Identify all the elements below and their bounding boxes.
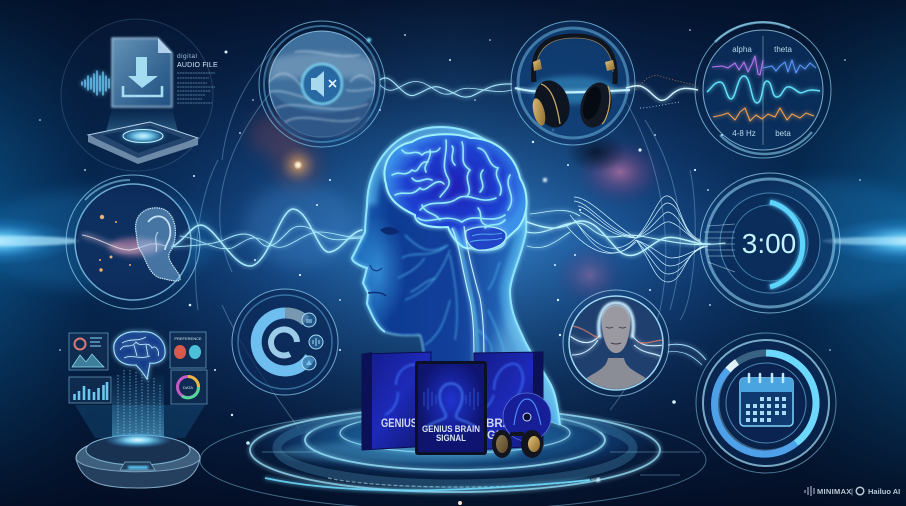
wave labels: 4-8 Hz bbox=[732, 129, 756, 138]
product tablet: SIGNAL bbox=[436, 433, 466, 444]
icon: document with download arrow bbox=[112, 38, 172, 107]
figure bbox=[570, 303, 668, 392]
panel: calendar bbox=[696, 333, 836, 473]
panel: analytics hologram bbox=[69, 332, 207, 488]
watermark: | bbox=[851, 487, 853, 496]
dashboard card: bar chart bbox=[69, 377, 111, 403]
product box: left bbox=[362, 352, 431, 450]
wave labels: theta bbox=[774, 45, 792, 54]
left edge light beam bbox=[0, 217, 80, 265]
watermark bbox=[805, 486, 900, 496]
icon: headphones bbox=[529, 36, 617, 132]
panel: muted sound waves bbox=[259, 21, 385, 147]
brain bbox=[384, 134, 527, 250]
dashboard card: gauge and area chart bbox=[69, 333, 108, 370]
icon: sound wave bars bbox=[82, 71, 109, 95]
icon: muted speaker bbox=[302, 64, 342, 104]
brain stem and nerves bbox=[398, 226, 505, 372]
product box: right: GI bbox=[487, 428, 499, 442]
panel: headphones bbox=[511, 21, 635, 145]
icon: calendar bbox=[740, 374, 793, 426]
ribbon wave: head to timer bbox=[565, 196, 735, 282]
panel: donut chart bbox=[232, 289, 338, 395]
label: digital audio file: digital bbox=[177, 53, 198, 60]
product box: left: GENIUS bbox=[381, 416, 417, 430]
panel: digital audio file bbox=[61, 19, 218, 171]
wave labels bbox=[732, 45, 792, 138]
particle stream bbox=[109, 238, 161, 256]
product box: right: BRA bbox=[486, 416, 511, 430]
light beam from device bbox=[104, 108, 180, 140]
product headphones bbox=[492, 430, 543, 458]
panel: ear bbox=[66, 175, 200, 309]
label: digital audio file: AUDIO FILE bbox=[177, 62, 218, 69]
brainwaves bbox=[707, 56, 820, 121]
product box: right bbox=[474, 352, 543, 450]
product disc bbox=[503, 393, 551, 441]
product tablet bbox=[415, 361, 487, 455]
projector base bbox=[76, 432, 200, 488]
device platform bbox=[88, 122, 198, 164]
dashboard card: ring chart: DATA bbox=[183, 385, 193, 390]
connecting swirl: woman to calendar bbox=[668, 344, 706, 365]
time readout: 3:00 bbox=[742, 228, 796, 259]
dashboard card: profiles bbox=[170, 332, 206, 368]
connecting wave: mute to headphones bbox=[380, 78, 512, 97]
sound wave: ear to head bbox=[172, 209, 362, 266]
icon: holographic brain bbox=[114, 332, 165, 379]
head silhouette bbox=[350, 127, 564, 425]
product tablet: GENIUS BRAIN bbox=[422, 424, 480, 435]
nebula and stars bbox=[39, 29, 861, 416]
inner head rim light bbox=[350, 127, 564, 425]
panel: timer bbox=[700, 173, 840, 313]
connecting wave: headphones to chart bbox=[626, 76, 698, 108]
wave labels: beta bbox=[775, 129, 791, 138]
large background arcs bbox=[195, 48, 695, 430]
panel: brainwave chart bbox=[695, 22, 831, 158]
wave labels: alpha bbox=[732, 45, 752, 54]
facial features bbox=[380, 227, 400, 235]
progress arc bbox=[770, 202, 803, 287]
label: digital audio file bbox=[177, 53, 218, 103]
bright wave: head to timer bbox=[527, 210, 725, 255]
icon: ear bbox=[136, 208, 180, 281]
progress ring bbox=[715, 353, 816, 454]
gyri bbox=[392, 140, 512, 228]
dashboard card: profiles: PREFERENCE bbox=[174, 336, 202, 341]
panel: meditating woman bbox=[563, 290, 669, 396]
donut rings bbox=[256, 313, 310, 371]
right edge light beam bbox=[822, 217, 906, 265]
central holographic platform bbox=[200, 408, 706, 506]
dashboard card: ring chart bbox=[171, 370, 207, 404]
small icons bbox=[302, 313, 323, 370]
projector beam bbox=[75, 405, 205, 438]
cerebellum bbox=[466, 227, 506, 250]
watermark: MINIMAX bbox=[817, 487, 852, 496]
head outline bbox=[352, 127, 560, 425]
watermark: Hailuo AI bbox=[868, 487, 900, 496]
